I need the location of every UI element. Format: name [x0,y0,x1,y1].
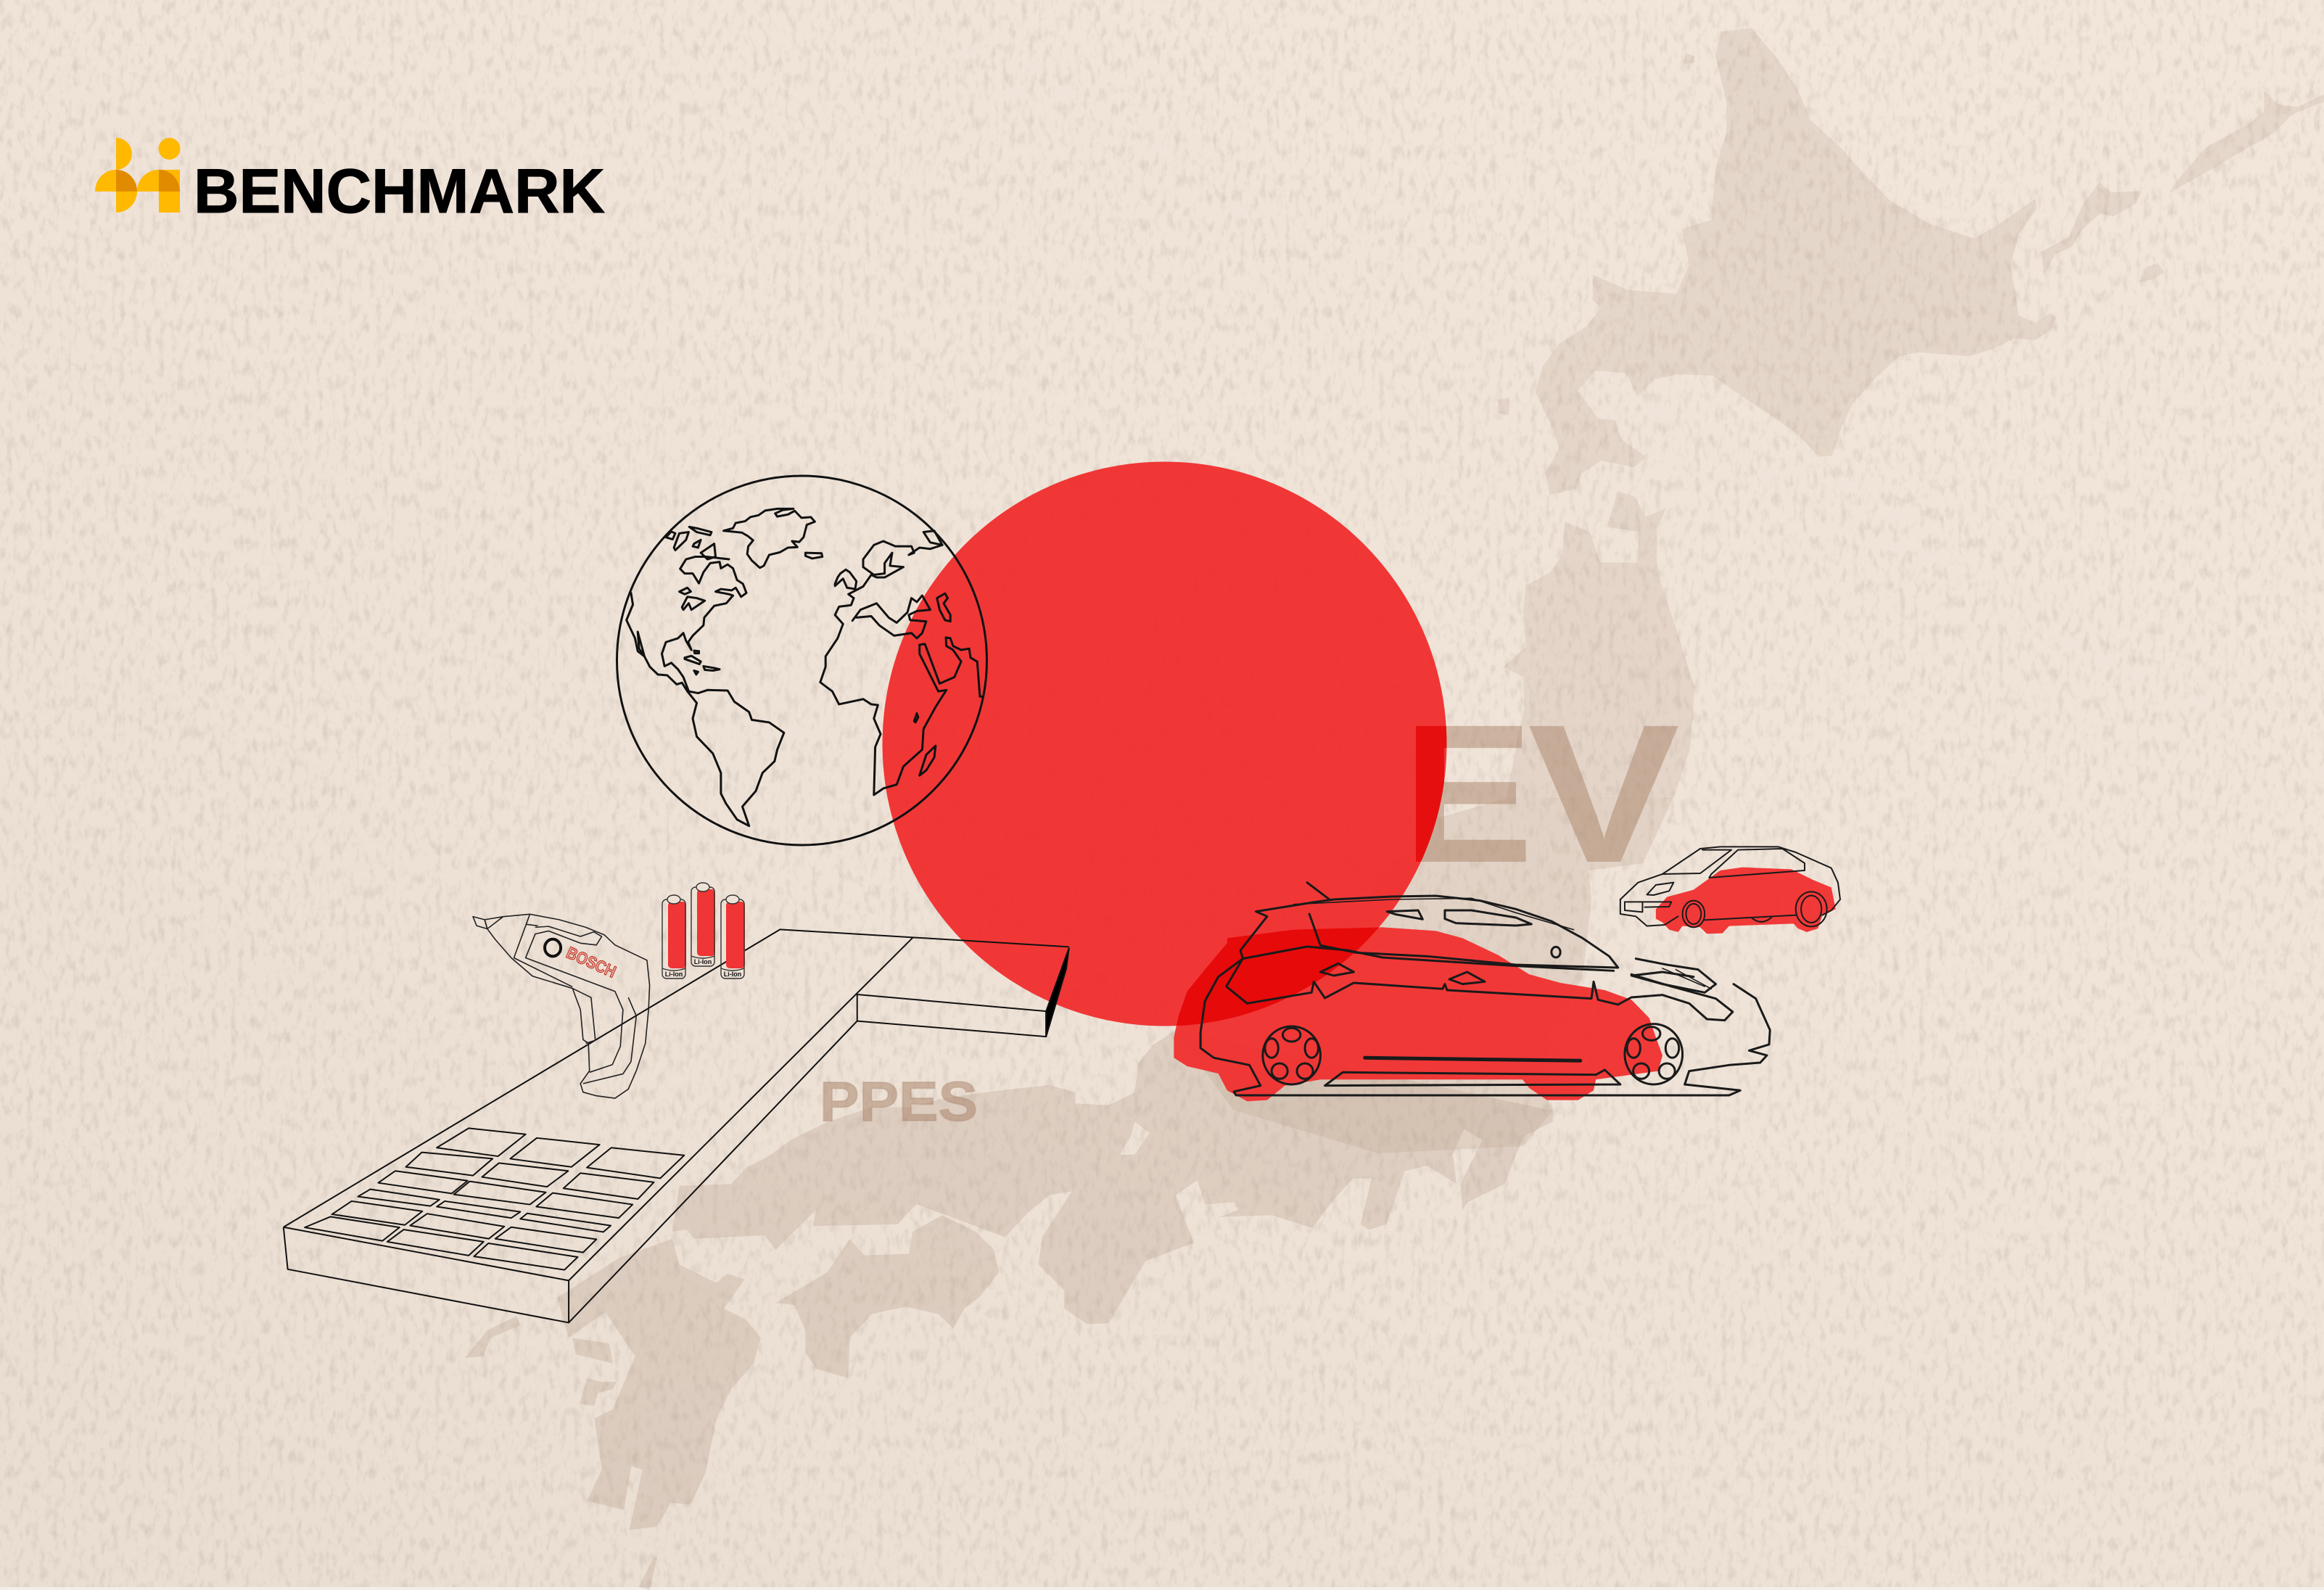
logo mark [95,138,180,213]
label: PPES: PPES [820,1071,978,1133]
continents [627,508,983,826]
tray outline [284,929,1069,1322]
label: EV [1403,683,1681,904]
Hokkaido and northern islands [1498,28,2324,798]
large car line drawing [1200,883,1770,1095]
globe [617,476,986,845]
map of Japan [465,28,2324,1590]
small car red fill [1656,868,1836,934]
battery left: Li-Ion [665,971,683,978]
logo: Benchmark [95,138,605,226]
small car line drawing [1620,847,1840,927]
logo wordmark: BENCHMARK [194,157,605,226]
label: EV: V [1528,683,1681,904]
label: EV: E [1403,683,1533,904]
car and sun overlap [1177,927,1379,1026]
large car red fill [1174,927,1662,1101]
globe outline [617,476,986,845]
southern Honshu, Shikoku and Kyushu [465,1030,1553,1590]
EV letter overlap with the sun: E [1403,683,1533,904]
battery cells [305,1128,684,1270]
battery tray [284,929,1069,1322]
red sun [882,461,1446,1026]
battery middle: Li-Ion [694,958,712,965]
cars [1174,868,1836,1101]
black end face [1046,948,1069,1037]
batteries [662,883,745,979]
drill outline [473,914,650,1098]
central Honshu [1175,798,1673,1153]
drill [473,914,650,1098]
drill brand: BOSCH [564,943,619,981]
battery right: Li-Ion [724,971,741,978]
